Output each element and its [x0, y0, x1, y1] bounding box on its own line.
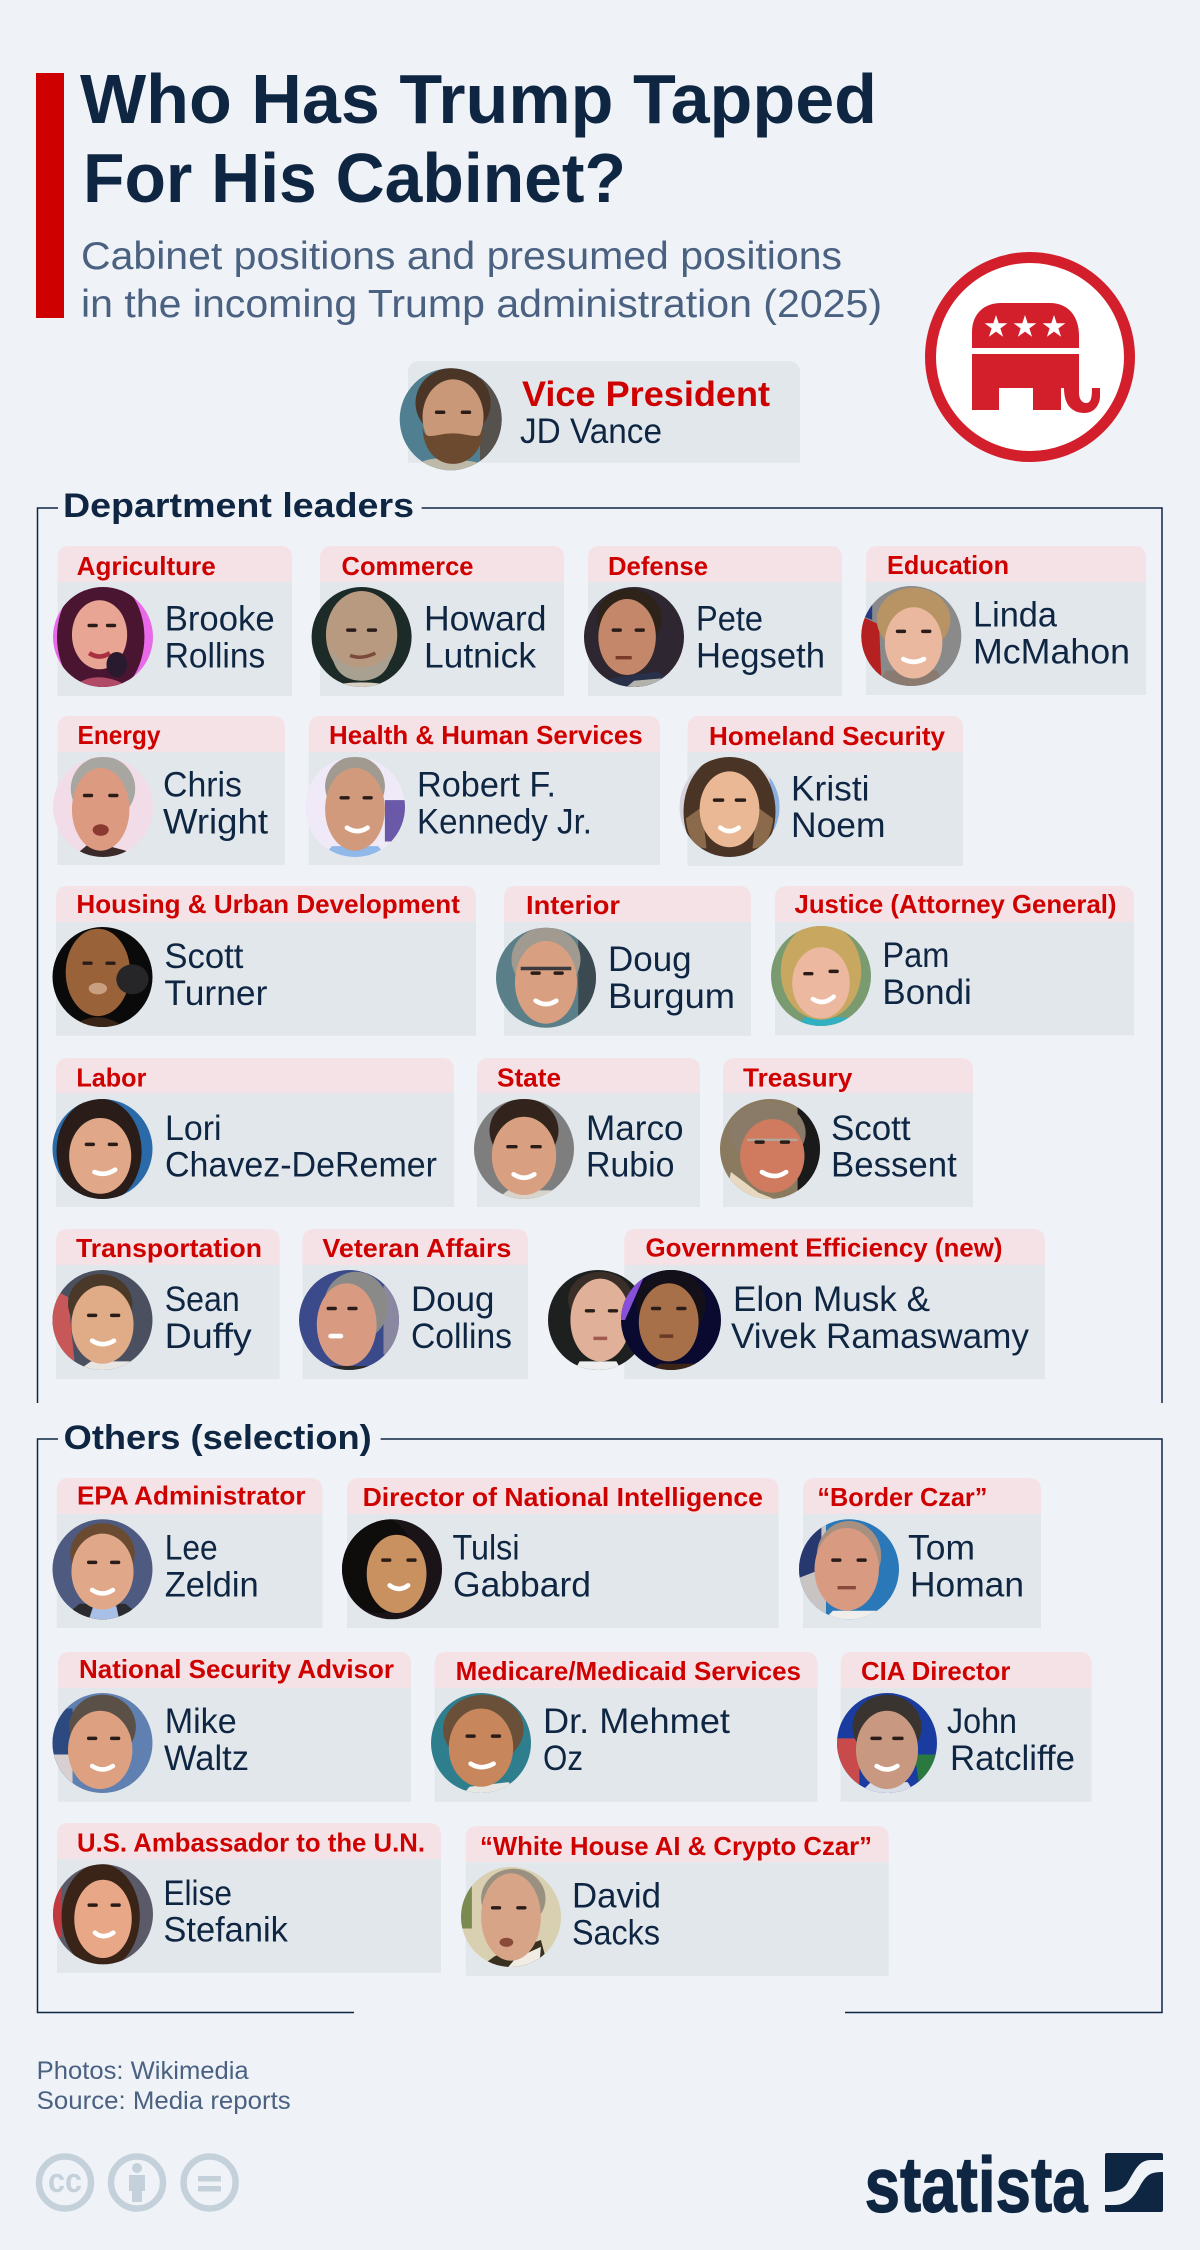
- card: EPA Administrator: EPA Administrator: [77, 1480, 306, 1510]
- card: Defense: [576, 546, 842, 696]
- photo: Kristi Noem: [680, 757, 780, 857]
- card: "White House AI & Crypto Czar": David: [572, 1877, 661, 1916]
- card: Housing & Urban Development: [45, 886, 476, 1036]
- card: Vice President: [392, 361, 800, 478]
- card: Veteran Affairs: Collins: [411, 1317, 512, 1356]
- panel: Others frame: [38, 1439, 1162, 2012]
- source text: Source: Media reports: [37, 2087, 291, 2115]
- photo: Mike Waltz: [45, 1686, 160, 1800]
- panel: Department leaders frame: [38, 508, 1162, 1403]
- card: Education: Education: [887, 550, 1009, 580]
- card: Interior: Interior: [526, 890, 620, 920]
- title: For His Cabinet?: [83, 139, 626, 217]
- card: Interior: Burgum: [608, 977, 735, 1016]
- card: Homeland Security: Kristi: [791, 770, 870, 809]
- card: Government Efficiency (new): Elon Musk &: [733, 1280, 930, 1319]
- card: EPA Administrator: Zeldin: [165, 1565, 259, 1604]
- source text: Photos: Wikimedia: [37, 2057, 249, 2085]
- title: [80, 60, 877, 217]
- card: Justice (Attorney General): Pam: [882, 936, 949, 975]
- card: "White House AI & Crypto Czar": Sacks: [572, 1914, 660, 1953]
- photo: Scott Bessent: [720, 1099, 820, 1199]
- photo: JD Vance: [400, 368, 502, 470]
- card: Government Efficiency (new): Government Efficiency (new): [646, 1233, 1002, 1263]
- card: CIA Director: [830, 1652, 1092, 1802]
- card: CIA Director: Ratcliffe: [950, 1739, 1075, 1778]
- card: Defense: Hegseth: [696, 637, 825, 676]
- card: Energy: Wright: [163, 802, 268, 841]
- card: Director of National Intelligence: Gabbard: [453, 1565, 591, 1604]
- photo: Doug Collins: [299, 1270, 399, 1370]
- card: Homeland Security: Homeland Security: [709, 721, 946, 751]
- photo: Howard Lutnick: [312, 587, 412, 687]
- photo: Scott Turner: [52, 927, 152, 1027]
- photo: Dr. Mehmet Oz: [424, 1686, 538, 1800]
- card: Interior: Doug: [608, 940, 692, 979]
- position: Vice President: [522, 375, 770, 414]
- photo: Pam Bondi: [771, 926, 871, 1026]
- heading: Department leaders: Department leaders: [63, 487, 414, 525]
- card: Homeland Security: Noem: [791, 806, 886, 845]
- card: National Security Advisor: [45, 1652, 411, 1802]
- card: Commerce: [304, 546, 564, 696]
- source text: [37, 2057, 291, 2115]
- card: Agriculture: Agriculture: [77, 551, 216, 581]
- card: State: Marco: [586, 1109, 684, 1148]
- card: "Border Czar": Tom: [908, 1528, 975, 1567]
- card: EPA Administrator: Lee: [165, 1528, 218, 1567]
- card: Agriculture: Brooke: [165, 600, 275, 639]
- card: Housing & Urban Development: Scott: [164, 937, 244, 976]
- card: Medicare/Medicaid Services: [424, 1652, 818, 1802]
- card: EPA Administrator: [45, 1478, 322, 1628]
- card: Commerce: Lutnick: [424, 637, 536, 676]
- photo: Robert F. Kennedy Jr.: [305, 757, 405, 857]
- photo: Pete Hegseth: [584, 587, 684, 687]
- photo: Brooke Rollins: [53, 587, 153, 687]
- card: "Border Czar": [792, 1478, 1041, 1628]
- icon: Republican elephant logo: [930, 258, 1130, 456]
- card: "Border Czar": Homan: [910, 1565, 1024, 1604]
- card: Health & Human Services: [298, 716, 660, 865]
- card: U.S. Ambassador to the U.N.: Stefanik: [163, 1911, 288, 1950]
- card: Housing & Urban Development: Turner: [164, 974, 268, 1013]
- card: Commerce: Commerce: [342, 551, 474, 581]
- card: "White House AI & Crypto Czar": “White House AI & Crypto Czar”: [480, 1831, 872, 1861]
- card: Health & Human Services: Kennedy Jr.: [417, 802, 592, 841]
- card: Veteran Affairs: Doug: [411, 1280, 494, 1319]
- card: Director of National Intelligence: Tulsi: [452, 1528, 520, 1567]
- card: Government Efficiency (new): Vivek Ramaswamy: [731, 1317, 1030, 1356]
- card: Medicare/Medicaid Services: Oz: [543, 1739, 583, 1778]
- card: National Security Advisor: Mike: [165, 1702, 237, 1741]
- card: National Security Advisor: National Security Advisor: [79, 1654, 394, 1684]
- card: Agriculture: [46, 546, 292, 697]
- logo: statista wordmark: statista: [865, 2140, 1088, 2228]
- card: Commerce: Howard: [424, 600, 546, 639]
- card: Energy: Energy: [78, 720, 161, 750]
- card: U.S. Ambassador to the U.N.: [46, 1823, 441, 1973]
- card: Transportation: Sean: [165, 1280, 240, 1319]
- card: "White House AI & Crypto Czar": [454, 1826, 889, 1976]
- photo: David Sacks: [454, 1860, 568, 1974]
- card: Transportation: Duffy: [165, 1317, 252, 1356]
- heading: Others (selection): Others (selection): [64, 1419, 372, 1457]
- card: Education: McMahon: [973, 632, 1130, 672]
- photo: Elise Stefanik: [46, 1857, 160, 1972]
- card: Treasury: Scott: [831, 1109, 911, 1148]
- card: Treasury: Bessent: [831, 1146, 957, 1185]
- card: State: State: [497, 1063, 561, 1093]
- card: Justice (Attorney General): [764, 886, 1134, 1035]
- card: Energy: Chris: [163, 766, 242, 805]
- card: U.S. Ambassador to the U.N.: Elise: [163, 1874, 232, 1913]
- card: Labor: [45, 1058, 454, 1207]
- card: Education: Linda: [973, 596, 1058, 635]
- photo: Marco Rubio: [474, 1099, 574, 1199]
- card: Housing & Urban Development: Housing & Urban Development: [76, 889, 460, 919]
- photo: Lee Zeldin: [52, 1519, 152, 1620]
- photo: Chris Wright: [53, 757, 153, 857]
- card: Labor: Lori: [165, 1109, 222, 1148]
- subtitle: [81, 235, 882, 326]
- card: Defense: Pete: [696, 600, 763, 639]
- card: Justice (Attorney General): Justice (Attorney General): [794, 889, 1116, 919]
- icon: Creative Commons licence badges: [39, 2156, 236, 2208]
- icon: Creative Commons licence badges: cc: [48, 2162, 82, 2200]
- card: Treasury: [712, 1058, 973, 1207]
- card: Treasury: Treasury: [743, 1063, 853, 1093]
- card: Homeland Security: [672, 716, 963, 869]
- card: Defense: Defense: [608, 551, 708, 581]
- photo: Sean Duffy: [52, 1270, 152, 1370]
- logo: statista mark: [1105, 2153, 1163, 2212]
- card: Justice (Attorney General): Bondi: [882, 973, 972, 1012]
- card: CIA Director: John: [947, 1702, 1017, 1741]
- card: National Security Advisor: Waltz: [164, 1739, 249, 1778]
- photo: Vivek Ramaswamy: [621, 1270, 721, 1370]
- subtitle: in the incoming Trump administration (2025): [81, 283, 882, 326]
- title: Who Has Trump Tapped: [80, 60, 877, 138]
- card: Education: [854, 546, 1146, 695]
- photo: Tulsi Gabbard: [342, 1519, 442, 1620]
- photo: Linda McMahon: [861, 586, 962, 686]
- card: Health & Human Services: Health & Human Services: [329, 720, 643, 750]
- photo: Doug Burgum: [496, 928, 596, 1028]
- card: Director of National Intelligence: Director of National Intelligence: [363, 1482, 763, 1512]
- photo: Lori Chavez-DeRemer: [52, 1099, 152, 1199]
- card: Veteran Affairs: [292, 1229, 528, 1379]
- card: Labor: Labor: [76, 1063, 146, 1093]
- title accent bar: [36, 73, 64, 318]
- card: Transportation: [45, 1229, 280, 1379]
- card: Health & Human Services: Robert F.: [417, 766, 556, 805]
- card: Transportation: Transportation: [76, 1233, 262, 1263]
- card: Medicare/Medicaid Services: Dr. Mehmet: [543, 1702, 730, 1741]
- card: State: Rubio: [586, 1146, 674, 1185]
- card: Government Efficiency (new): [540, 1229, 1045, 1379]
- name: JD Vance: [520, 412, 662, 451]
- card: Labor: Chavez-DeRemer: [165, 1146, 437, 1185]
- card: Director of National Intelligence: [334, 1478, 778, 1628]
- card: CIA Director: CIA Director: [861, 1656, 1010, 1686]
- card: State: [466, 1058, 700, 1207]
- card: U.S. Ambassador to the U.N.: U.S. Ambassador to the U.N.: [77, 1828, 425, 1858]
- card: Energy: [46, 716, 285, 865]
- card: Medicare/Medicaid Services: Medicare/Medicaid Services: [456, 1656, 801, 1686]
- card: Veteran Affairs: Veteran Affairs: [322, 1233, 511, 1263]
- photo: John Ratcliffe: [830, 1686, 944, 1800]
- photo: Elon Musk: [548, 1270, 634, 1370]
- card: "Border Czar": “Border Czar”: [817, 1482, 987, 1512]
- photo: Tom Homan: [792, 1512, 906, 1627]
- card: Agriculture: Rollins: [165, 637, 265, 676]
- card: Interior: [488, 886, 751, 1036]
- subtitle: Cabinet positions and presumed positions: [81, 235, 842, 278]
